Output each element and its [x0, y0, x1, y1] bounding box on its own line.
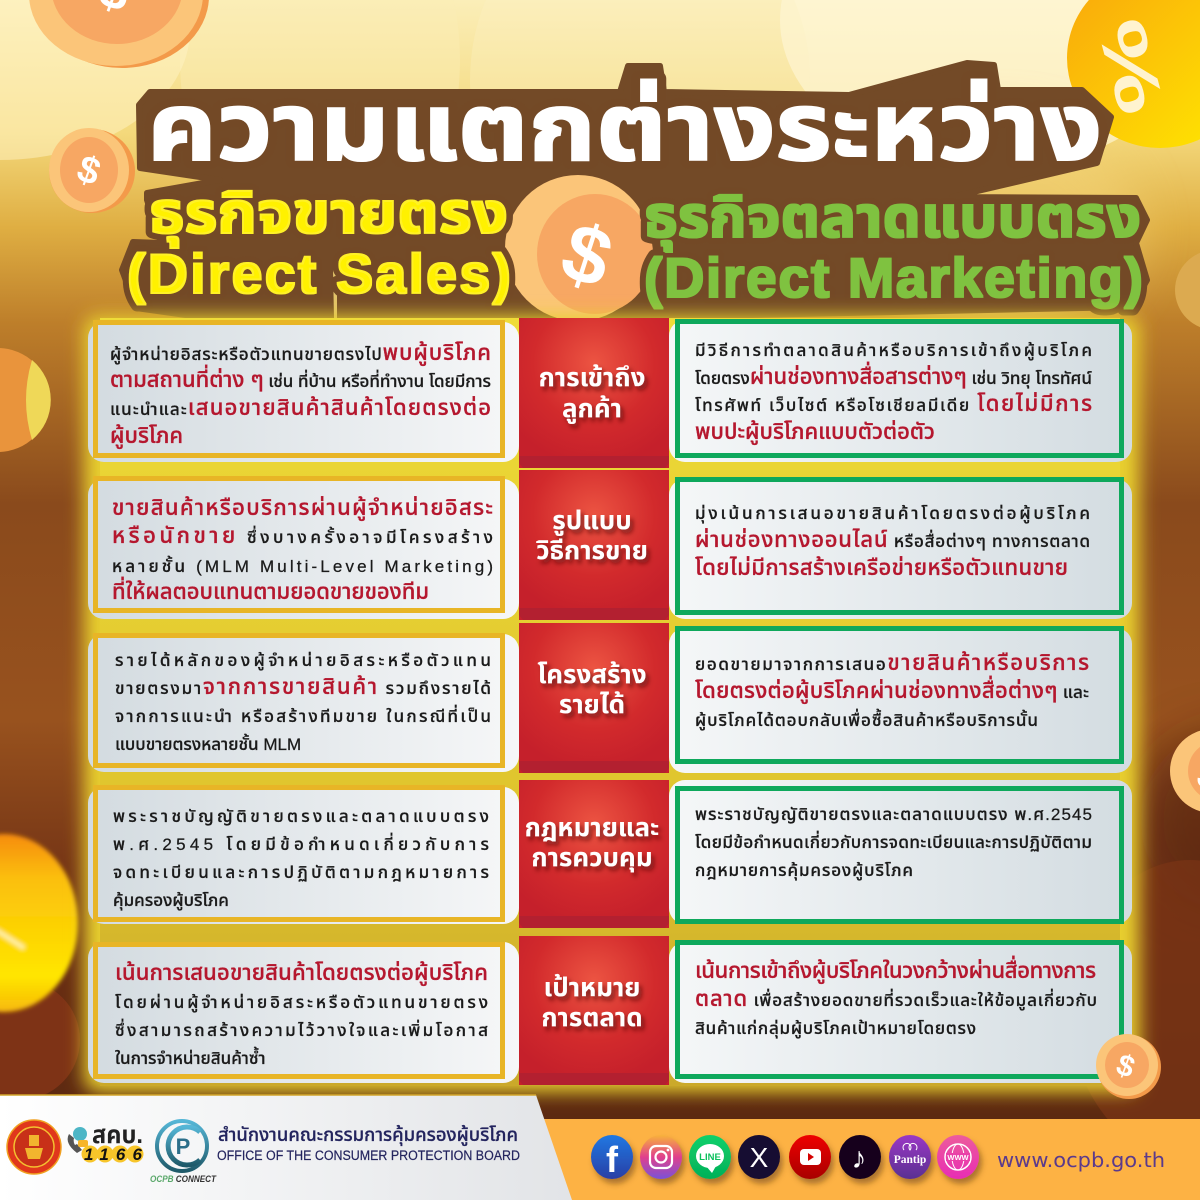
- panel: row 3 left: [88, 634, 519, 772]
- title backing shape: [122, 63, 1147, 320]
- panel: row 3 left: รายได้หลักของผู้จำหน่ายอิสระหรือตัวแทน: [115, 650, 491, 672]
- panel: row 2 right: ผ่านช่องทางออนไลน์ หรือสื่อต่างๆ ทางการตลาด: [695, 527, 1090, 552]
- panel: row 5 label: [519, 936, 669, 1085]
- coin: right edge: [1170, 729, 1200, 813]
- footer: orange bar: [500, 1119, 1200, 1200]
- logo: OCPB hotline 1166: [68, 1121, 144, 1164]
- panel: row 2 left: หลายชั้น (MLM Multi-Level Marketing): [112, 555, 493, 576]
- panel: row 3 right: โดยตรงต่อผู้บริโภคผ่านช่องทางสื่อต่างๆ และ: [695, 675, 1089, 704]
- panel: row 2 label: [519, 470, 669, 620]
- icon: instagram: [640, 1135, 682, 1179]
- panel: row 5 right: สินค้าแก่กลุ่มผู้บริโภคเป้าหมายโดยตรง: [695, 1018, 976, 1040]
- logo: government seal: [7, 1120, 61, 1174]
- panel: row 4 left: [88, 787, 519, 924]
- panel: row 1 right: โดยตรงผ่านช่องทางสื่อสารต่างๆ เช่น วิทยุ โทรทัศน์: [695, 361, 1092, 389]
- coin: top left: [29, 0, 209, 68]
- heading: direct marketing: [644, 185, 1143, 309]
- text: organisation name: OFFICE OF THE CONSUMER PROTECTION BOARD: [217, 1148, 520, 1163]
- panel: row 1 left: ผู้จำหน่ายอิสระหรือตัวแทนขายตรงไปพบผู้บริโภค: [110, 340, 491, 366]
- yellow glow band: [84, 316, 1140, 1092]
- coin: bottom left yellow: [0, 834, 78, 1012]
- panel: row 4 left: พ.ศ.2545 โดยมีข้อกำหนดเกี่ยวกับการ: [113, 832, 489, 854]
- panel: row 1 left: [88, 322, 519, 462]
- panel: row 5 left: ในการจำหน่ายสินค้าซ้ำ: [115, 1046, 266, 1068]
- icon: youtube: [789, 1135, 831, 1179]
- panel: row 4 left: จดทะเบียนและการปฏิบัติตามกฎหมายการ: [113, 863, 489, 882]
- panel: row 5 left: เน้นการเสนอขายสินค้าโดยตรงต่อผู้บริโภค: [115, 960, 488, 986]
- coin: center dollar: $: [551, 205, 623, 306]
- icon: website: WWW: [947, 1153, 970, 1162]
- icon: line: LINE: [699, 1152, 721, 1163]
- coin: left dollar: $: [72, 148, 106, 194]
- panel: row 1 left: ผู้บริโภค: [110, 423, 183, 449]
- panel: row 4 left: คุ้มครองผู้บริโภค: [113, 890, 229, 912]
- heading: direct marketing: (Direct Marketing): [644, 246, 1143, 309]
- lens circle left: [0, 348, 51, 452]
- panel: row 5 label: การตลาด: [541, 1002, 643, 1032]
- logo: OCPB hotline 1166: สคบ.: [92, 1121, 143, 1149]
- text: website url: www.ocpb.go.th: [997, 1148, 1165, 1172]
- icon: x: [738, 1135, 780, 1179]
- panel: row 2 right: [669, 479, 1132, 619]
- panel: row 5 left: [88, 942, 519, 1083]
- panel: row 3 label: [519, 623, 669, 773]
- icon: facebook: [591, 1135, 633, 1180]
- coin: top right percent: [1067, 0, 1200, 148]
- panel: row 1 label: [519, 318, 669, 468]
- icon: website: [937, 1135, 979, 1179]
- panel: row 5 right: ตลาด เพื่อสร้างยอดขายที่รวดเร็วและให้ข้อมูลเกี่ยวกับ: [695, 986, 1097, 1012]
- panel: row 4 right: โดยมีข้อกำหนดเกี่ยวกับการจดทะเบียนและการปฏิบัติตาม: [695, 830, 1092, 852]
- panel: row 1 right: พบปะผู้บริโภคแบบตัวต่อตัว: [695, 419, 935, 445]
- heading: direct marketing: ธุรกิจตลาดแบบตรง: [644, 185, 1141, 252]
- title: ความแตกต่างระหว่าง: [147, 75, 1102, 180]
- panel: row 4 left: พระราชบัญญัติขายตรงและตลาดแบบตรง: [113, 807, 489, 826]
- panel: row 2 label: รูปแบบ: [552, 505, 632, 536]
- panel: row 1 right: โทรศัพท์ เว็บไซต์ หรือโซเชียลมีเดีย โดยไม่มีการ: [695, 391, 1092, 416]
- panel: row 1 label: การเข้าถึง: [539, 362, 645, 392]
- panel: row 2 left: [88, 478, 519, 619]
- panel: row 3 right: ยอดขายมาจากการเสนอขายสินค้าหรือบริการ: [695, 650, 1089, 675]
- logo: OCPB connect: [150, 1121, 217, 1185]
- panel: row 4 right: [669, 780, 1132, 924]
- icon: facebook: f: [606, 1139, 619, 1180]
- coin: center dollar: [505, 175, 653, 321]
- panel: row 2 label: วิธีการขาย: [536, 535, 648, 565]
- coin: bottom right: $: [1112, 1048, 1139, 1085]
- icon: tiktok: [839, 1135, 881, 1179]
- icon: pantip: [889, 1135, 931, 1179]
- heading: direct sales: ธุรกิจขายตรง: [149, 181, 508, 248]
- panel: row 3 right: ผู้บริโภคได้ตอบกลับเพื่อซื้อสินค้าหรือบริการนั้น: [695, 708, 1038, 732]
- panel: row 1 left: แนะนำและเสนอขายสินค้าสินค้าโดยตรงต่อ: [110, 395, 491, 420]
- panel: row 2 left: ขายสินค้าหรือบริการผ่านผู้จำหน่ายอิสระ: [112, 495, 493, 521]
- panel: row 2 right: มุ่งเน้นการเสนอขายสินค้าโดยตรงต่อผู้บริโภค: [695, 503, 1090, 525]
- panel: row 2 right: โดยไม่มีการสร้างเครือข่ายหรือตัวแทนขาย: [695, 555, 1068, 580]
- panel: row 1 left: ตามสถานที่ต่าง ๆ เช่น ที่บ้าน หรือที่ทำงาน โดยมีการ: [110, 364, 491, 392]
- icon: x: X: [750, 1142, 769, 1173]
- coin: left dollar: [49, 128, 135, 213]
- text: organisation name: [217, 1125, 520, 1163]
- coin: top right percent: %: [1083, 11, 1179, 122]
- heading: direct sales: [127, 181, 511, 305]
- heading: direct sales: (Direct Sales): [127, 242, 511, 305]
- panel: row 1 right: มีวิธีการทำตลาดสินค้าหรือบริการเข้าถึงผู้บริโภค: [695, 340, 1092, 362]
- panel: row 4 label: การควบคุม: [531, 842, 653, 873]
- icon: line: [689, 1135, 731, 1179]
- logo: OCPB connect: OCPB CONNECT: [150, 1174, 217, 1185]
- panel: row 4 label: กฎหมายและ: [525, 812, 659, 842]
- panel: row 1 label: ลูกค้า: [562, 393, 622, 424]
- footer: white logo panel: [0, 1095, 572, 1200]
- panel: row 4 label: [519, 780, 669, 928]
- panel: row 1 right: [669, 320, 1132, 462]
- panel: row 5 left: ซึ่งสามารถสร้างความไว้วางใจและเพิ่มโอกาส: [115, 1018, 488, 1040]
- panel: row 3 left: ขายตรงมาจากการขายสินค้า รวมถึงรายได้: [115, 674, 491, 699]
- panel: row 3 left: แบบขายตรงหลายชั้น MLM: [115, 733, 301, 754]
- panel: row 3 label: รายได้: [559, 689, 625, 719]
- panel: row 3 label: โครงสร้าง: [537, 659, 647, 689]
- logo: OCPB connect: P: [176, 1134, 190, 1159]
- panel: row 3 right: [669, 628, 1132, 773]
- logo: OCPB hotline 1166: 1166: [84, 1145, 143, 1164]
- coin: bottom right: [1096, 1034, 1161, 1099]
- text: organisation name: สำนักงานคณะกรรมการคุ้มครองผู้บริโภค: [218, 1125, 518, 1147]
- panel: row 5 right: [669, 942, 1132, 1083]
- panel: row 4 right: พระราชบัญญัติขายตรงและตลาดแบบตรง พ.ศ.2545: [695, 805, 1092, 824]
- panel: row 3 left: จากการแนะนำ หรือสร้างทีมขาย ในกรณีที่เป็น: [115, 704, 491, 726]
- panel: row 5 left: โดยผ่านผู้จำหน่ายอิสระหรือตัวแทนขายตรง: [115, 992, 488, 1014]
- icon: tiktok: ♪: [852, 1142, 866, 1175]
- panel: row 4 right: กฎหมายการคุ้มครองผู้บริโภค: [695, 860, 913, 882]
- icon: pantip: Pantip: [894, 1154, 926, 1166]
- panel: row 5 right: เน้นการเข้าถึงผู้บริโภคในวงกว้างผ่านสื่อทางการ: [695, 955, 1096, 984]
- panel: row 2 left: หรือนักขาย ซึ่งบางครั้งอาจมีโครงสร้าง: [112, 523, 493, 548]
- panel: row 2 left: ที่ให้ผลตอบแทนตามยอดขายของทีม: [112, 576, 429, 604]
- panel: row 5 label: เป้าหมาย: [544, 972, 640, 1002]
